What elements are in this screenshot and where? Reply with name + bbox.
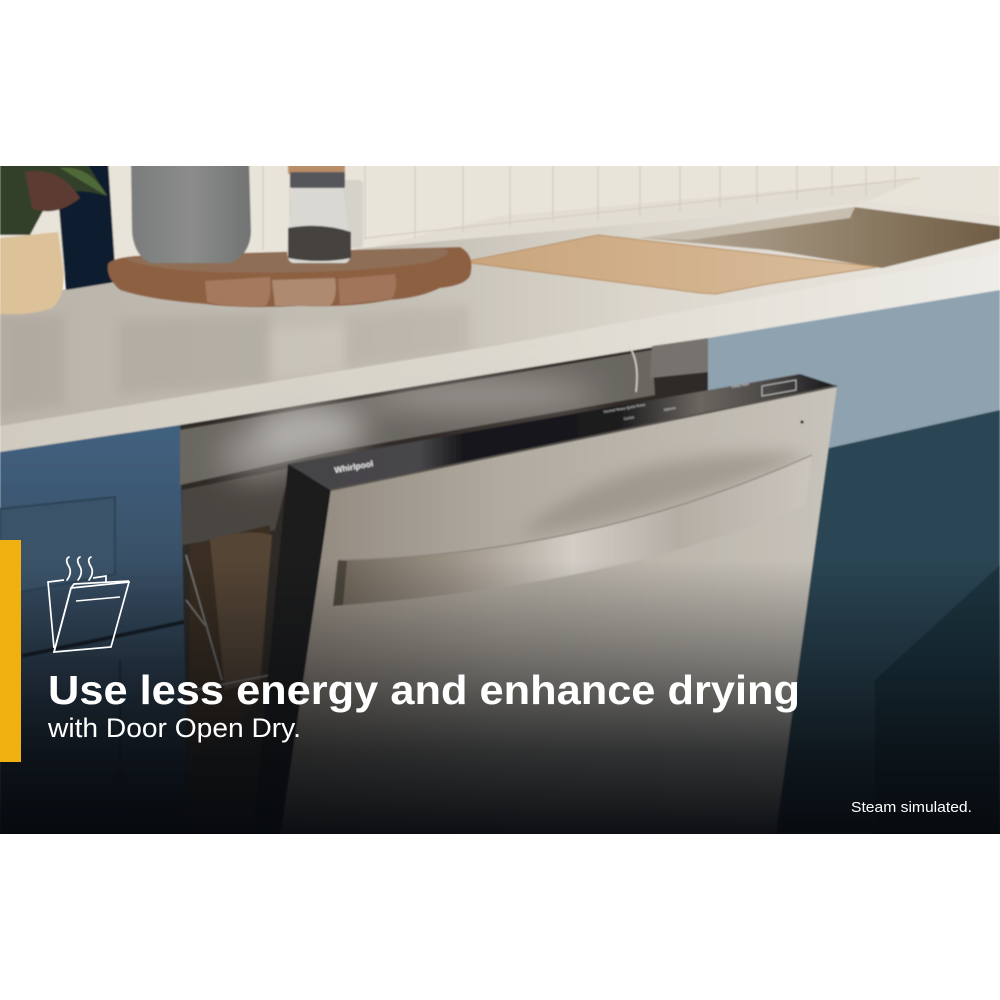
beige plant pot (0, 232, 64, 314)
wooden tray (108, 247, 472, 307)
subheading: with Door Open Dry. (47, 713, 301, 743)
footnote: Steam simulated. (851, 799, 972, 816)
door front panel (280, 386, 837, 840)
handle shadow on door (520, 452, 810, 535)
upper right cabinet (708, 290, 1000, 462)
plant leaves (0, 160, 107, 235)
dark gradient overlay (0, 560, 1000, 834)
control labels: Cycles (623, 415, 635, 421)
tiled backsplash wall (0, 160, 1000, 276)
countertop surface (0, 204, 1000, 428)
cutting board (463, 235, 878, 294)
control labels (603, 382, 749, 421)
control panel top (288, 374, 837, 490)
open dishwasher interior (180, 338, 708, 840)
grey canister (131, 160, 251, 263)
door handle (333, 455, 812, 606)
door top edge highlight (331, 386, 837, 490)
pepper grinder (287, 160, 363, 263)
sink basin (640, 200, 1000, 268)
headline: Use less energy and enhance drying (48, 667, 800, 713)
paper towel roll (923, 160, 982, 203)
control buttons (762, 380, 796, 396)
Whirlpool logo: Whirlpool (334, 458, 374, 475)
yellow accent bar (0, 540, 21, 762)
photo: kitchen scene with open dishwasher (0, 160, 1000, 840)
status light (800, 420, 804, 424)
icon: open dishwasher door with steam (48, 557, 129, 652)
left cabinet (0, 425, 190, 840)
dishwasher door (252, 374, 837, 840)
navy vase behind plant (55, 160, 116, 290)
steam (220, 381, 600, 480)
control labels: Delay Start (731, 382, 749, 389)
lower right cabinet (740, 410, 1000, 840)
door side edge (267, 464, 332, 711)
control labels: Normal Heavy Quick Rinse (603, 403, 646, 414)
counter reflections (0, 305, 470, 415)
control labels: Options (663, 406, 676, 412)
counter front edge (0, 253, 1000, 453)
